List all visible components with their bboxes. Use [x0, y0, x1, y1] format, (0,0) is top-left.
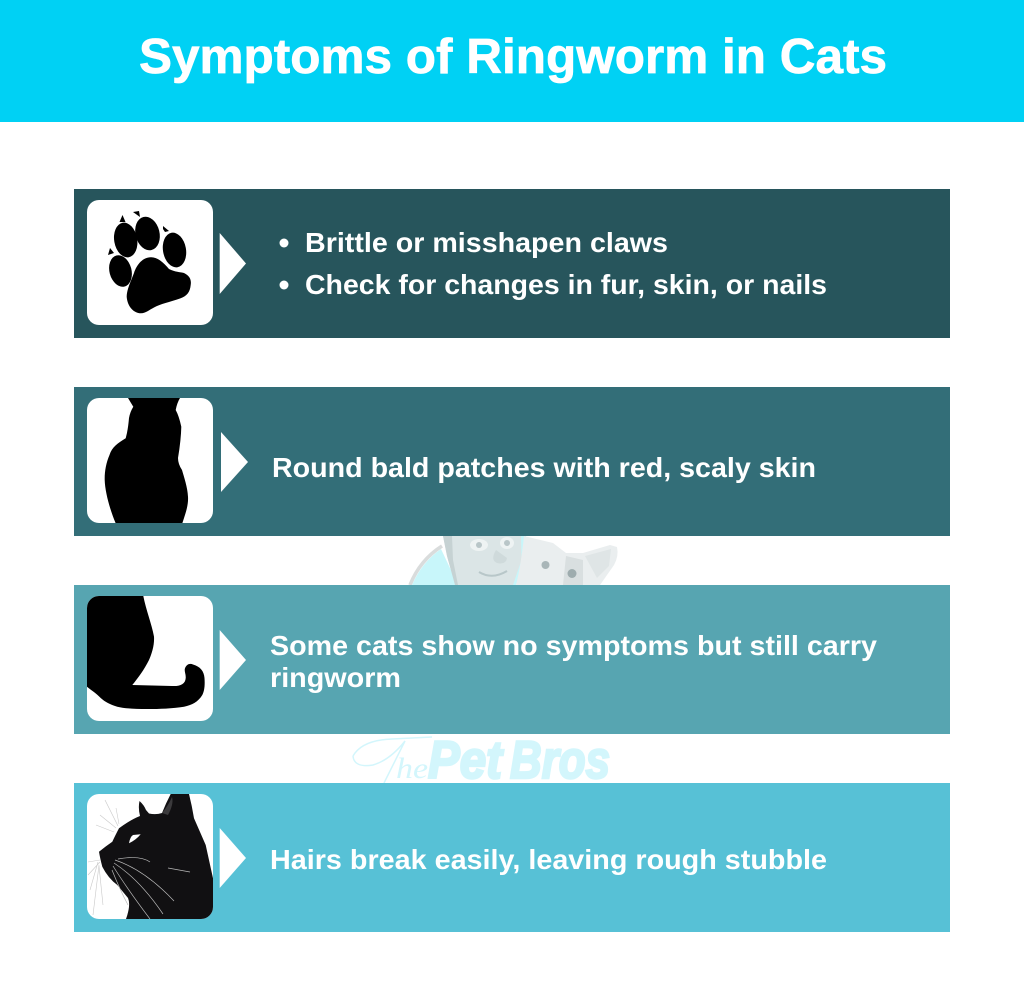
panel: no symptoms	[74, 585, 950, 734]
watermark: The Pet Bros logo: he	[396, 752, 428, 785]
watermark: The Pet Bros logo	[353, 731, 610, 790]
title: Symptoms of Ringworm in Cats	[139, 30, 887, 84]
watermark: Pet Bros mascot	[410, 536, 618, 585]
icon: cat head profile	[87, 794, 213, 919]
icon: paw print	[87, 200, 213, 325]
text: Some cats show no symptoms but still carry	[270, 630, 877, 661]
arrow	[221, 432, 248, 492]
text: Round bald patches with red, scaly skin	[272, 452, 816, 483]
text: ringworm	[270, 662, 401, 693]
arrow	[220, 233, 246, 294]
text: bullet list: Brittle or misshapen claws	[305, 227, 668, 258]
text: bullet list	[280, 227, 827, 300]
text: bullet list: Check for changes in fur, skin, or nails	[305, 269, 827, 300]
panel: brittle claws	[74, 189, 950, 338]
arrow	[220, 630, 246, 690]
panel: bald patches	[74, 387, 950, 536]
text	[270, 630, 877, 693]
header banner	[0, 0, 1024, 122]
watermark: The Pet Bros logo: Bros	[510, 731, 610, 790]
text: Hairs break easily, leaving rough stubble	[270, 844, 827, 875]
arrow	[220, 828, 246, 888]
icon: sitting cat silhouette	[87, 398, 213, 523]
watermark: The Pet Bros logo: Pet	[428, 731, 504, 790]
panel: broken hairs	[74, 783, 950, 932]
icon: cat tail silhouette	[87, 596, 213, 721]
